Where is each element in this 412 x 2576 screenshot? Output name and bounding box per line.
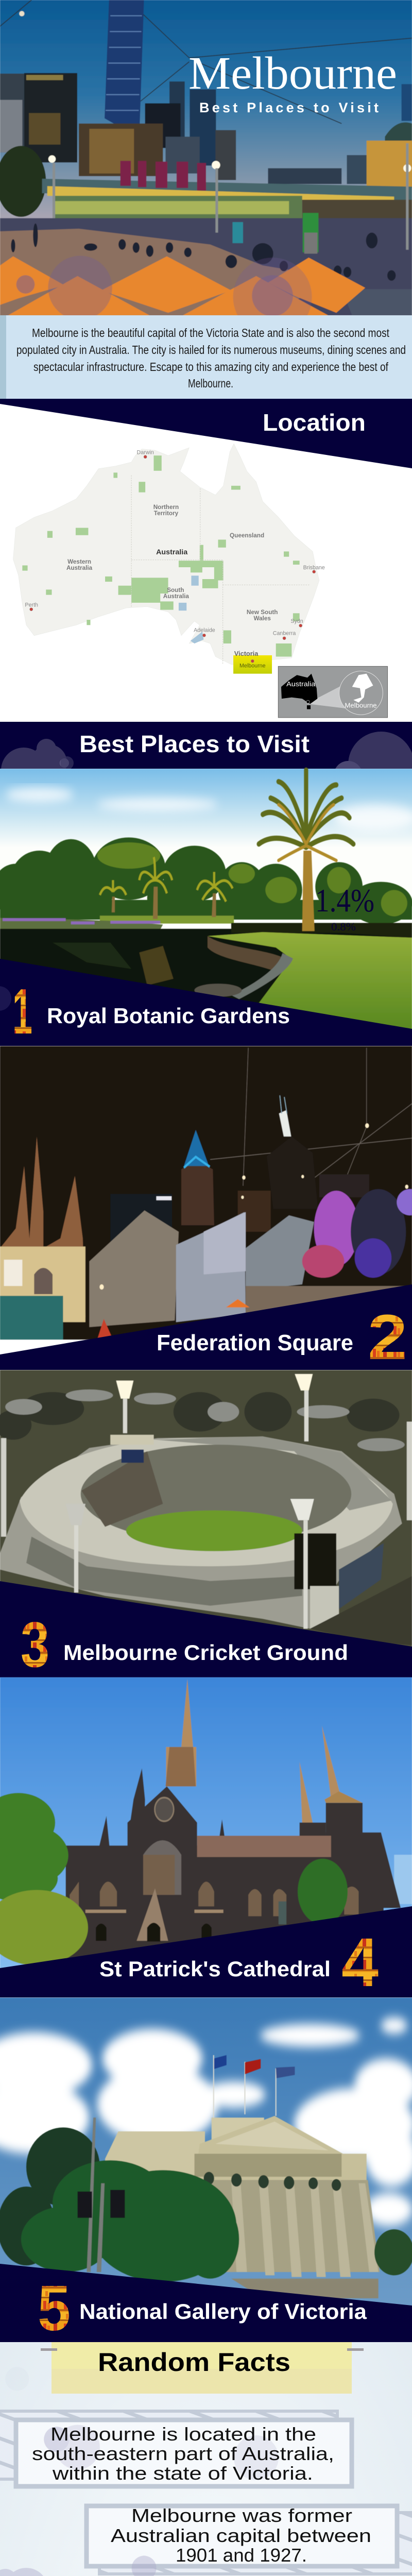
title band: Federation Square (0, 1284, 412, 1373)
title band: Melbourne Cricket Ground (0, 1581, 412, 1681)
location banner: Location (263, 409, 366, 436)
title band: National Gallery of Victoria: National Gallery of Victoria (79, 2299, 367, 2324)
stray label: 0.8%: 0.8% (331, 920, 356, 933)
hero photo: Federation Square at dusk (0, 0, 412, 336)
heading band: Best Places to Visit: Best Places to Visit (79, 731, 310, 757)
fact 1 text: south-eastern part of Australia, (32, 2443, 334, 2464)
inset locator map: Melbourne (345, 701, 377, 709)
random facts heading banner (41, 2342, 364, 2394)
random facts background (0, 2342, 412, 2576)
fact 1 text: within the state of Victoria. (52, 2463, 313, 2484)
number 5: 5 (38, 2273, 71, 2344)
title band: St Patrick's Cathedral (0, 1906, 412, 2001)
fact 2 text: Australian capital between (111, 2525, 371, 2546)
map of Australia: Perth (25, 602, 38, 608)
decorative bubbles in facts section (0, 2367, 406, 2576)
title band: Royal Botanic Gardens (0, 959, 412, 1047)
map of Australia: Queensland (230, 532, 264, 539)
map of Australia: Western (67, 558, 91, 565)
photo: Royal Botanic Gardens (0, 769, 412, 1035)
map of Australia: Australia (66, 565, 93, 571)
random facts heading banner: Random Facts (98, 2348, 290, 2377)
title band: Federation Square: Federation Square (157, 1330, 353, 1355)
fact 2 text: Melbourne was former (131, 2505, 352, 2526)
map of Australia: Melbourne (239, 663, 266, 669)
number 3: 3 (21, 1609, 49, 1681)
map of Australia: Canberra (273, 631, 296, 637)
title band: Royal Botanic Gardens: Royal Botanic Gardens (47, 1004, 290, 1028)
fact 2 text (111, 2505, 371, 2566)
map of Australia: Northern (153, 504, 179, 511)
map of Australia: New South (247, 609, 278, 616)
map of Australia: Sydn (290, 618, 303, 624)
title band: Melbourne Cricket Ground: Melbourne Cricket Ground (63, 1640, 348, 1665)
intro panel: Melbourne. (188, 377, 233, 390)
fact 1 text: Melbourne is located in the (50, 2424, 316, 2445)
photo: Federation Square (0, 1046, 412, 1340)
photo: St Patrick's Cathedral (0, 1677, 412, 1970)
intro panel (0, 315, 412, 399)
title: Melbourne: Melbourne (188, 48, 397, 99)
map of Australia (13, 444, 325, 674)
number 4: 4 (341, 1924, 379, 2001)
heading band: Best Places to Visit (0, 722, 412, 798)
map of Australia: Wales (253, 615, 271, 622)
map of Australia: Adelaide (194, 628, 215, 634)
number 2: 2 (368, 1302, 407, 1373)
map of Australia: South (167, 587, 184, 594)
map of Australia: Australia (163, 593, 189, 600)
fact 2 text: 1901 and 1927. (176, 2545, 307, 2566)
fact card 2 frames (87, 2506, 412, 2574)
map of Australia: Brisbane (303, 565, 325, 571)
inset locator map (278, 666, 388, 718)
photo: Melbourne Cricket Ground (0, 1370, 412, 1666)
fact 1 text (32, 2424, 334, 2484)
location banner (0, 399, 412, 468)
stray label: 1.4%: 1.4% (315, 882, 374, 919)
fact card 1 frames (0, 2411, 352, 2486)
map of Australia: Victoria (234, 650, 259, 657)
location section background (0, 399, 412, 722)
title band: St Patrick's Cathedral: St Patrick's Cathedral (99, 1957, 331, 1981)
number 1: 1 (12, 976, 32, 1047)
subtitle: Best Places to Visit (199, 100, 379, 115)
inset locator map: Australia (286, 680, 316, 688)
title band: National Gallery of Victoria (0, 2264, 412, 2344)
photo: National Gallery of Victoria (0, 1997, 412, 2313)
map of Australia: Darwin (136, 450, 154, 456)
map of Australia: Australia (156, 548, 188, 556)
map of Australia: Territory (154, 510, 179, 517)
